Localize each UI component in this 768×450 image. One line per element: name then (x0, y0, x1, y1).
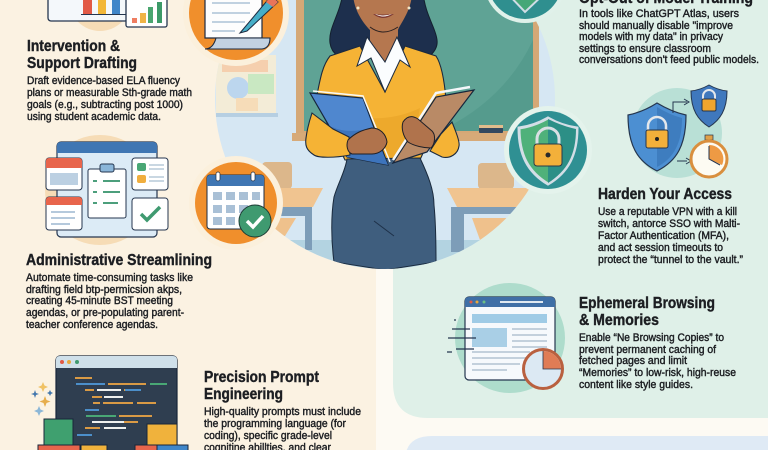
chalkboard (292, 0, 547, 141)
icon: top shield badge (484, 0, 566, 23)
heading: precision prompt (204, 369, 319, 403)
hands (347, 128, 387, 154)
text: opt-out body (579, 8, 759, 66)
text: intervention body: Draft evidence-based ELA fluency (27, 75, 180, 87)
sweater body (316, 46, 446, 160)
icon: shields and stopwatch (628, 85, 727, 178)
text: administrative body: agendas, or pre-populating parent- (26, 307, 184, 319)
panel: cream left column (0, 0, 376, 450)
icon: reports dashboard (48, 0, 167, 31)
heading: intervention (27, 38, 137, 72)
text: intervention body: using student academic data. (27, 111, 161, 123)
heading: ephemeral (579, 295, 715, 329)
text: administrative body: creating 45-minute BST meeting (26, 295, 173, 307)
text: precision body (204, 406, 361, 450)
text: intervention body (27, 75, 192, 123)
icon: lock shield badge (504, 106, 592, 194)
icon: code window with blocks (31, 356, 188, 450)
text: administrative body (26, 272, 193, 331)
text: administrative body: teacher conference agendas. (26, 319, 158, 331)
bulletin board (216, 55, 278, 117)
text: harden body: switch, antorce SSO with Malti- (598, 218, 740, 230)
heading: precision prompt: Engineering (204, 386, 283, 403)
hair (330, 0, 437, 56)
heading: administrative: Administrative Streamlining (26, 252, 212, 269)
text: opt-out body: conversations don't feed public models. (579, 54, 759, 66)
heading: intervention: Support Drafting (27, 55, 137, 72)
left sleeve (306, 113, 350, 157)
heading: precision prompt: Precision Prompt (204, 369, 319, 386)
text: precision body: the programming language (for (204, 418, 346, 430)
panel: privacy mint (393, 0, 768, 418)
blue folder (310, 93, 388, 165)
desks (262, 162, 530, 252)
text: harden body: protect the “tunnel to the vault.” (598, 254, 743, 266)
panel: blue bottom (405, 436, 768, 450)
text: harden body: Factor Authentication (MFA), (598, 230, 729, 242)
text: precision body: High-quality prompts must include (204, 406, 361, 418)
text: administrative body: drafting field btp-permicsion akps, (26, 284, 182, 296)
text: harden body (598, 206, 743, 266)
tan folder (393, 90, 474, 163)
text: ephemeral body: Enable “Ne Browsing Copies” to (579, 332, 724, 344)
text: harden body: and act session timeouts to (598, 242, 723, 254)
heading: intervention: Intervention & (27, 38, 120, 55)
text: intervention body: goals (e.g., subtracting post 1000) (27, 99, 183, 111)
icon: calendar badge (189, 156, 283, 250)
text: harden body: Use a reputable VPN with a kill (598, 206, 737, 218)
text: administrative body: Automate time-consuming tasks like (26, 272, 193, 284)
text: precision body: coding), specific grade-level (204, 430, 332, 442)
text: ephemeral body: fetched pages and limit (579, 355, 687, 367)
text: ephemeral body: “Memories” to low-risk, high-reuse (579, 367, 736, 379)
text: opt-out body: models with my data" in privacy (579, 31, 723, 43)
heading: ephemeral: Ephemeral Browsing (579, 295, 715, 312)
icon: admin window (45, 135, 168, 245)
text: intervention body: plans or measurable Sth-grade math (27, 87, 192, 99)
text: ephemeral body (579, 332, 736, 391)
icon: browser with clock (447, 283, 565, 393)
right sleeve (430, 122, 459, 157)
text: ephemeral body: content like style guides. (579, 379, 693, 391)
face and neck (354, 0, 412, 61)
text: opt-out body: In tools like ChatGPT Atlas, users (579, 8, 739, 20)
shirt collar (357, 37, 410, 92)
illustration: teacher in classroom (210, 0, 560, 275)
skirt (332, 158, 436, 270)
icon: drafting badge (183, 0, 289, 66)
text: ephemeral body: prevent permanent caching of (579, 344, 717, 356)
heading: ephemeral: & Memories (579, 312, 659, 329)
text: opt-out body: settings to ensure classroom (579, 43, 711, 55)
text: opt-out body: should manually disable "improve (579, 20, 733, 32)
heading: harden: Harden Your Access (598, 186, 732, 203)
